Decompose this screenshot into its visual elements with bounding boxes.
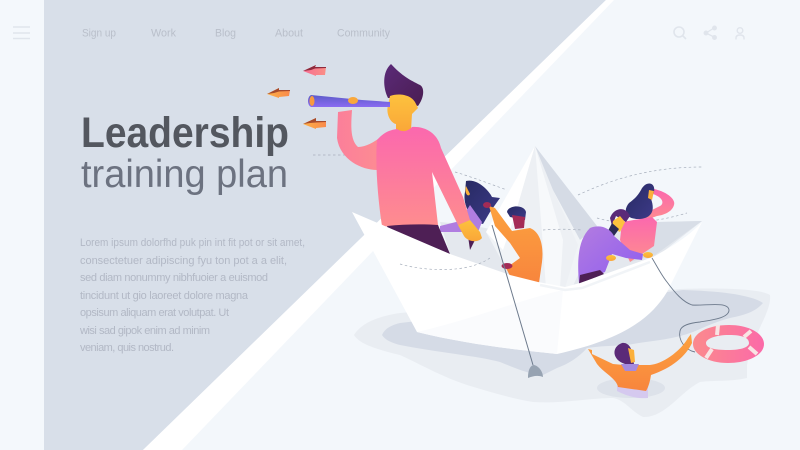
background panel: grey blue diagonal	[44, 0, 606, 450]
face and neck	[387, 95, 418, 133]
body text block: wisi sad gipok enim ad minim	[79, 325, 210, 337]
arrow: target orange bottom	[303, 118, 326, 129]
arrow: target pink	[303, 65, 326, 76]
arrow: target orange top	[267, 88, 290, 98]
body text block	[79, 237, 305, 354]
navigation menu: About	[275, 28, 303, 40]
water shadow inner	[382, 290, 763, 375]
trousers	[387, 224, 450, 254]
title	[81, 109, 289, 196]
hair	[384, 64, 423, 106]
body text block: tincidunt ut gio laoreet dolore magna	[80, 290, 249, 302]
anchor rope	[492, 225, 533, 365]
raised arm	[337, 110, 381, 170]
navigation menu: Sign up	[82, 28, 116, 40]
person: swimmer in water	[588, 334, 692, 398]
person: woman with dark hair left	[440, 181, 500, 250]
navigation menu: Blog	[215, 28, 236, 40]
body text block: opsisum aliquam erat volutpat. Ut	[80, 307, 229, 319]
icon: hamburger menu	[13, 27, 30, 38]
icon: search	[674, 27, 686, 39]
navigation menu	[82, 28, 390, 40]
boat back interior	[440, 221, 702, 290]
hand and arm	[458, 220, 482, 241]
person: bearded man in violet	[578, 209, 643, 284]
hands on rope	[606, 252, 653, 261]
navigation menu: Work	[151, 28, 176, 40]
dashed motion lines	[313, 155, 702, 230]
spyglass	[308, 95, 390, 107]
body text block: sed diam nonummy nibhfuoier a euismod	[80, 272, 268, 284]
icon: share	[704, 26, 716, 39]
title: Leadership	[81, 109, 289, 157]
life ring rope	[652, 258, 729, 352]
person: man in orange shirt	[483, 202, 542, 283]
navigation menu: Community	[337, 28, 390, 40]
title: training plan	[81, 153, 288, 196]
left sidebar strip	[0, 0, 44, 450]
person: big man with spyglass	[308, 64, 482, 254]
paper boat	[440, 146, 702, 290]
torso	[376, 127, 470, 227]
life ring	[693, 325, 764, 363]
icon: anchor weight	[528, 365, 543, 378]
water shadow outer	[354, 289, 770, 417]
swimmer shadow	[597, 378, 665, 398]
icon: user	[736, 28, 744, 40]
boat hull front	[352, 212, 702, 354]
paper sail	[486, 146, 598, 288]
person: woman shading eyes	[620, 183, 674, 262]
boat back right fold	[630, 221, 702, 262]
body text block: veniam, quis nostrud.	[80, 342, 174, 354]
body text block: consectetuer adipiscing fyu ton pot a a elit,	[80, 255, 287, 267]
body text block: Lorem ipsum dolorfhd puk pin int fit pot or sit amet,	[80, 237, 305, 249]
diagonal white band	[143, 0, 614, 450]
